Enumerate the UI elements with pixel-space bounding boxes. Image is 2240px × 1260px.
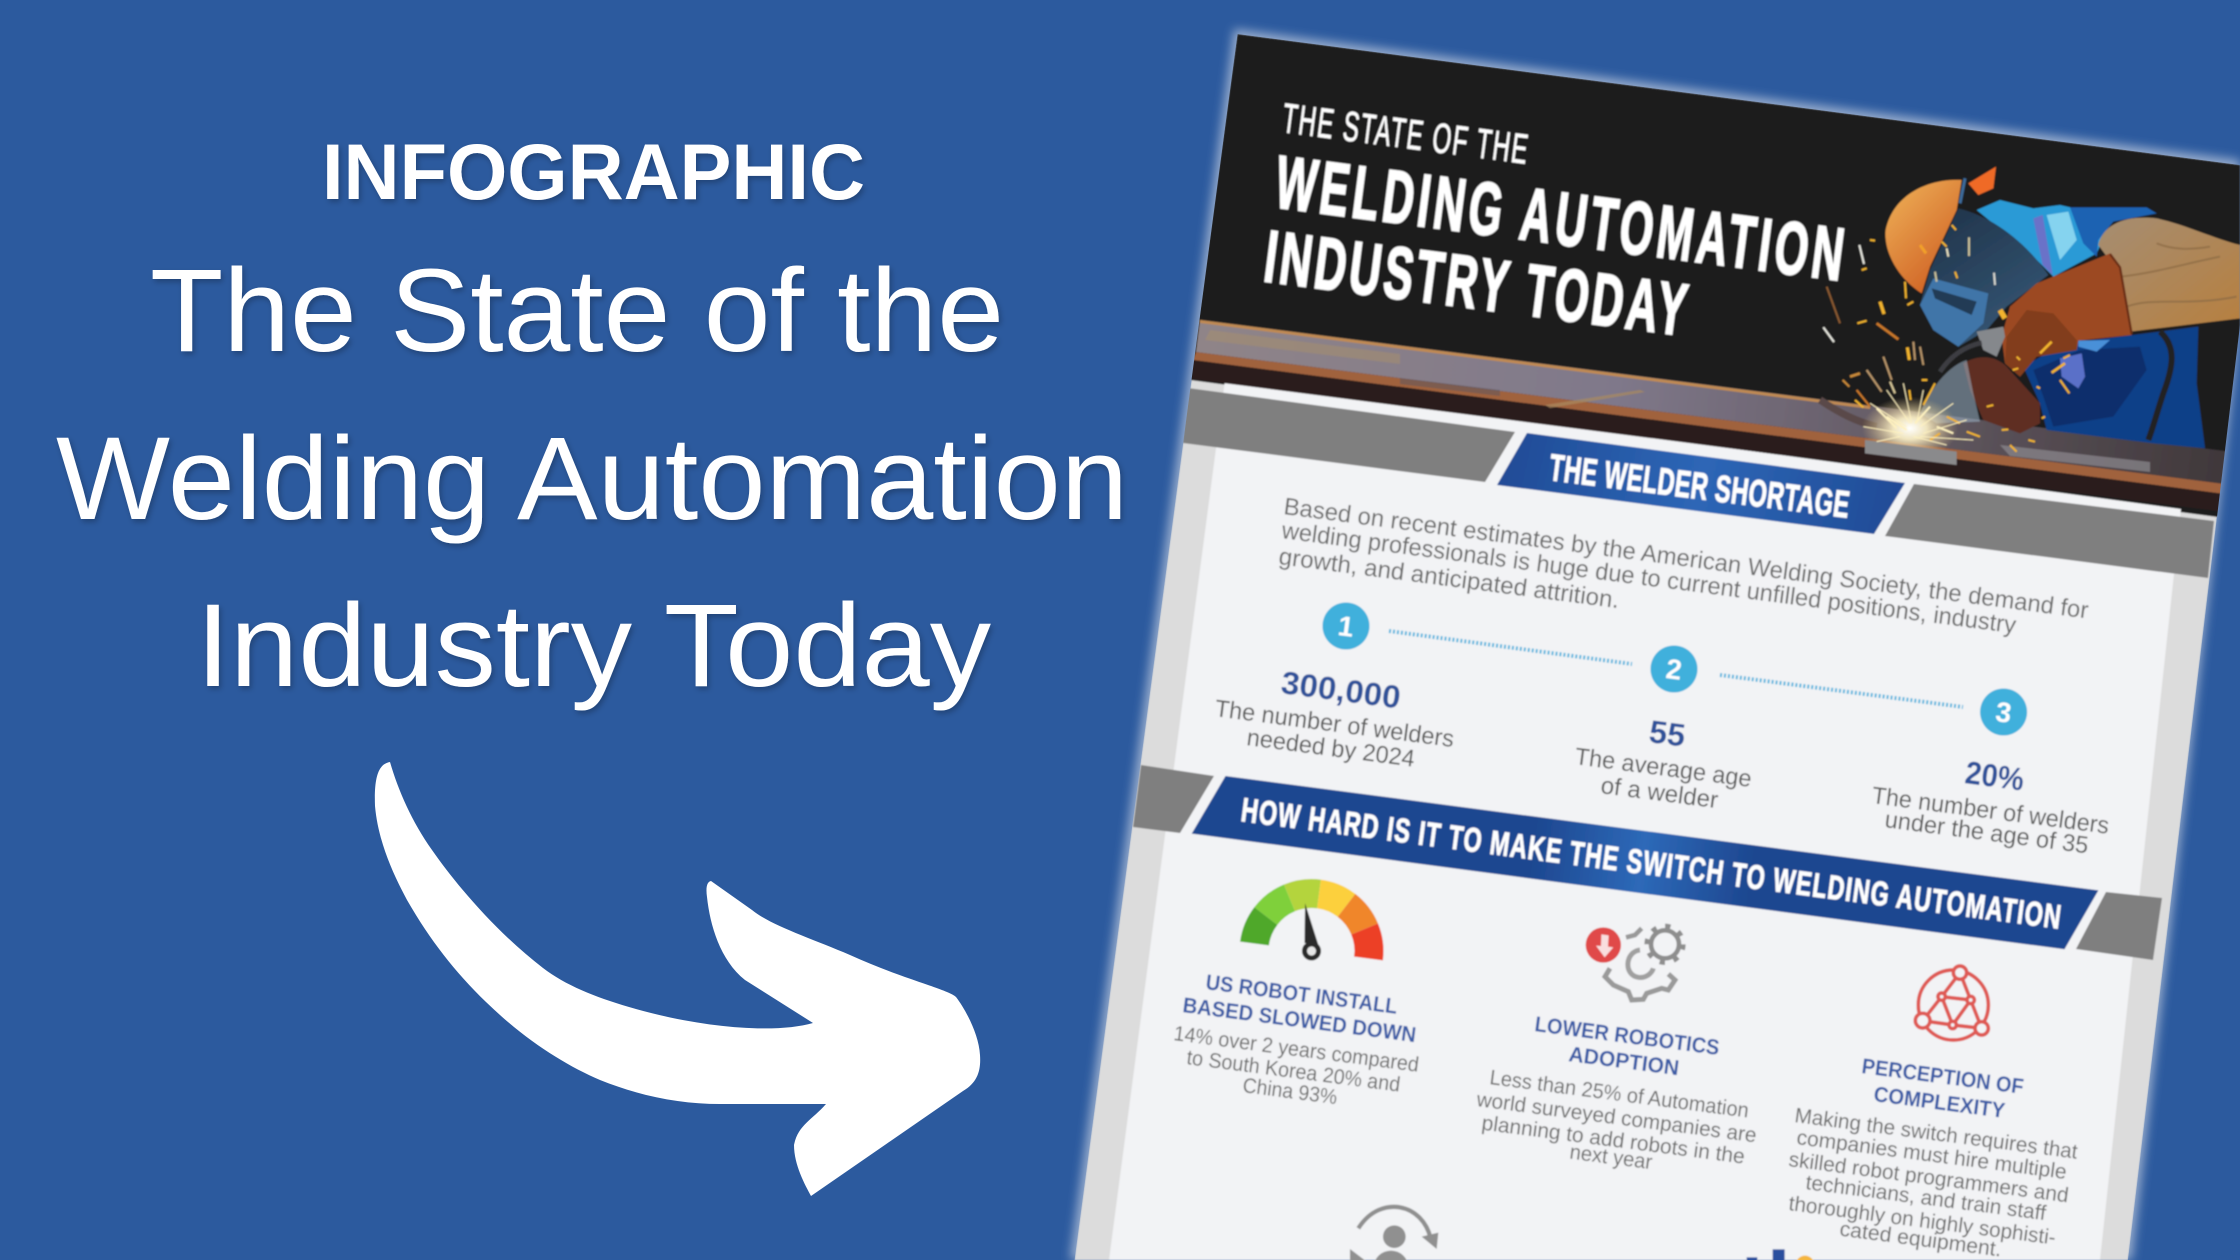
title line 2: Welding Automation	[56, 413, 1128, 545]
panel: light body	[1109, 380, 2181, 1260]
mask lower shield	[1920, 278, 1988, 347]
gray bar: left of first banner	[1183, 388, 1515, 482]
banner heading: HOW HARD IS IT TO MAKE THE SWITCH TO WELDING AUTOMATION	[1239, 792, 2063, 937]
banner: how hard is it	[1192, 776, 2098, 949]
sleeve folds	[2120, 243, 2237, 307]
column body text	[1474, 1066, 1758, 1174]
column body text: world surveyed companies are	[1474, 1088, 1758, 1147]
spark cone	[1920, 360, 1980, 423]
panel: dark header	[1190, 34, 2240, 520]
text block: shortage intro: Based on recent estimates by the American Welding Society, the demand for	[1282, 493, 2090, 624]
card edge glow	[1070, 29, 2240, 1260]
mask window	[1932, 288, 1977, 315]
text block: shortage intro: welding professionals is huge due to current unfilled positions, industry	[1279, 517, 2018, 639]
column heading: ADOPTION	[1567, 1042, 1681, 1080]
column body text: Making the switch requires that	[1793, 1104, 2079, 1164]
glove shading	[2005, 310, 2077, 377]
stat timeline connectors	[1389, 631, 1963, 707]
column: perception of complexity	[1787, 966, 2079, 1260]
weld flash	[1864, 398, 1956, 450]
stat 1	[1213, 602, 1456, 773]
weld rod	[1820, 400, 1877, 427]
column heading: PERCEPTION OF	[1860, 1054, 2025, 1099]
icon: red network sphere	[1915, 966, 1988, 1040]
lower hand glove	[1963, 357, 2040, 433]
icon: partially visible bar chart	[1747, 1249, 1814, 1260]
cuff seam	[2110, 254, 2132, 334]
navy coverall	[2023, 327, 2205, 448]
column body text: China 93%	[1241, 1074, 1339, 1109]
column heading: US ROBOT INSTALL	[1204, 970, 1399, 1019]
blue shoulder	[2070, 207, 2157, 257]
column: lower robotics adoption	[1474, 926, 1758, 1174]
gray bar: left of second banner	[1133, 765, 1214, 833]
shirt patch lower	[2060, 353, 2085, 388]
stat 3	[1870, 688, 2111, 859]
text block: shortage intro: growth, and anticipated attrition.	[1277, 543, 1621, 614]
column heading: LOWER ROBOTICS	[1533, 1012, 1721, 1060]
title line 1: The State of the	[150, 245, 1004, 377]
stat caption: The number of welders	[1870, 782, 2111, 840]
column body text: technicians, and train staff	[1804, 1171, 2047, 1225]
gray bar: right of first banner	[1885, 484, 2214, 578]
heading: infographic title text	[56, 127, 1128, 712]
column body text: cated equipment.	[1838, 1218, 2003, 1260]
column body text	[1172, 1022, 1420, 1109]
arrow: curved white arrow pointing to the infographic	[375, 762, 980, 1196]
hat flare	[1968, 167, 1996, 195]
icon: number badge 2: 2	[1664, 653, 1684, 686]
column body text: 14% over 2 years compared	[1172, 1022, 1420, 1077]
gray bar: right of second banner	[2076, 892, 2162, 960]
column heading	[1860, 1054, 2025, 1123]
welding mask	[1920, 208, 2048, 347]
sparks	[1823, 225, 2070, 452]
stat 2	[1573, 646, 1753, 814]
icon: number badge 1: 1	[1336, 610, 1356, 643]
column body text: skilled robot programmers and	[1787, 1148, 2070, 1207]
metal plank	[1192, 320, 2240, 514]
welding torch	[1977, 327, 2005, 357]
column heading: COMPLEXITY	[1872, 1082, 2006, 1123]
column body text: companies must hire multiple	[1795, 1126, 2068, 1184]
column body text: Less than 25% of Automation	[1488, 1066, 1750, 1123]
column body text: thoroughly on highly sophisti-	[1787, 1192, 2057, 1250]
stat value: 300,000	[1279, 664, 1403, 715]
gauntlet glove	[2002, 253, 2132, 377]
stat caption: The number of welders	[1213, 695, 1456, 753]
column heading	[1533, 1012, 1721, 1080]
column body text: to South Korea 20% and	[1185, 1046, 1402, 1097]
photo: welder with sparks	[1820, 167, 2240, 465]
icon: gears with red down arrow	[1586, 926, 1683, 1000]
stat caption: needed by 2024	[1245, 724, 1416, 773]
column: US robot install	[1172, 886, 1420, 1109]
shirt patches under glove	[2078, 340, 2110, 352]
column body text	[1787, 1104, 2079, 1260]
stat caption: The average age	[1573, 743, 1753, 793]
title line 3: Industry Today	[196, 580, 991, 712]
icon: person with rotating arrows	[1350, 1207, 1438, 1260]
column heading	[1181, 970, 1417, 1047]
jacket strap	[2033, 215, 2053, 275]
icon: number badge 3	[1980, 688, 2027, 736]
hat strap	[1960, 178, 1965, 203]
header kicker: THE STATE OF THE	[1280, 95, 1531, 174]
header title text	[1260, 95, 1849, 351]
icon: number badge 3: 3	[1994, 696, 2013, 729]
icon: gauge	[1254, 886, 1376, 965]
stat caption: under the age of 35	[1883, 806, 2090, 859]
hose	[2148, 332, 2172, 440]
coverall shade	[2033, 347, 2147, 427]
jacket highlight	[2047, 212, 2077, 260]
header title line 2: INDUSTRY TODAY	[1260, 215, 1692, 351]
cyan jacket	[1977, 200, 2107, 277]
banner heading: THE WELDER SHORTAGE	[1547, 445, 1852, 526]
column body text: next year	[1568, 1141, 1654, 1174]
stat caption	[1573, 743, 1753, 814]
stat value: 20%	[1963, 754, 2026, 798]
icon: number badge 2	[1650, 646, 1698, 692]
header title line 1: WELDING AUTOMATION	[1271, 140, 1849, 296]
column body text: planning to add robots in the	[1480, 1112, 1746, 1169]
panel: tilted infographic preview	[1074, 34, 2240, 1260]
label: INFOGRAPHIC: INFOGRAPHIC	[322, 127, 865, 216]
stat value: 55	[1647, 713, 1687, 754]
banner: the welder shortage	[1497, 433, 1905, 534]
stat caption: of a welder	[1599, 772, 1720, 814]
torch cable	[1940, 343, 1982, 372]
weld plate	[1865, 440, 1957, 465]
icon: number badge 1	[1322, 602, 1370, 650]
panel: card base	[1074, 34, 2240, 1260]
column heading: BASED SLOWED DOWN	[1181, 993, 1417, 1047]
tan sleeve	[2098, 218, 2240, 332]
hard hat	[1885, 180, 1962, 293]
